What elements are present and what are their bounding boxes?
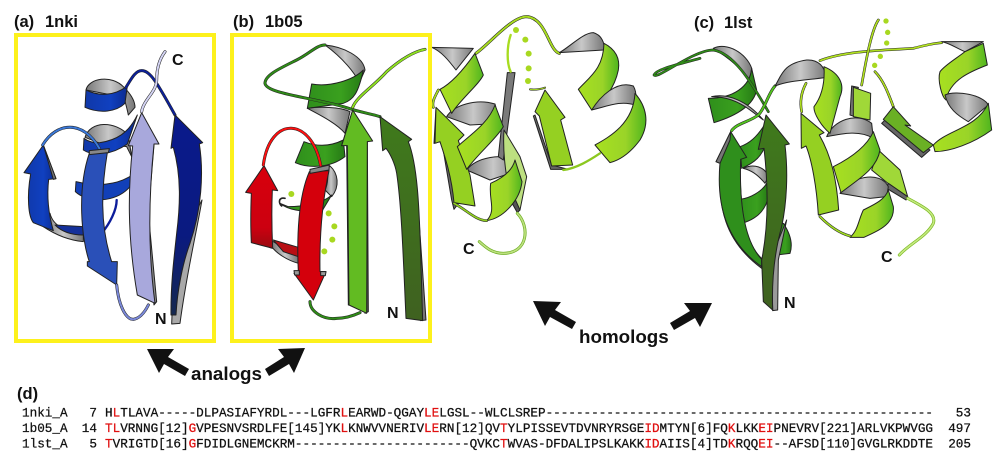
panel b: 1b05 red and green structure <box>246 45 426 321</box>
sequence alignment <box>22 406 971 452</box>
terminus labels: C <box>463 241 475 258</box>
dark right strand <box>171 115 203 324</box>
green helix <box>265 45 380 212</box>
panel b: 1b05 light green domain <box>432 17 646 253</box>
arrow: analogs right <box>265 348 305 376</box>
panel heading a: 1nki <box>45 13 78 31</box>
label: analogs: analogs <box>191 363 262 384</box>
left arrow strand <box>24 127 99 231</box>
label: homologs: homologs <box>579 326 669 347</box>
middle strand <box>82 149 148 319</box>
panel heading c: 1lst <box>724 14 753 32</box>
terminus labels: N <box>784 295 796 312</box>
terminus labels: N <box>155 311 167 328</box>
sequence alignment: 1lst_A <box>22 436 68 452</box>
panel heading a: (a) <box>14 13 34 31</box>
sequence alignment: 205 <box>948 436 971 452</box>
sequence alignment: HLTLAVA-----DLPASIAFYRDL---LGFRLEARWD-QGAYLELGSL--WLCLSREP--------------------------------------------------- <box>105 406 933 420</box>
light strand <box>128 52 165 305</box>
sequence alignment: 497 <box>948 421 971 436</box>
terminus labels: C <box>881 249 893 266</box>
arrow: analogs left <box>147 349 189 376</box>
panel heading d: (d) <box>17 385 38 403</box>
panel c: 1lst structure <box>654 18 992 311</box>
panel a: 1nki structure <box>24 52 203 324</box>
sequence alignment: 7 <box>89 406 97 420</box>
panel heading b: (b) <box>233 13 254 31</box>
terminus labels: C <box>172 52 184 69</box>
panel heading b: 1b05 <box>265 13 303 31</box>
sequence alignment: 14 <box>82 421 97 436</box>
red strands <box>246 128 329 300</box>
dark green strand <box>380 117 426 321</box>
sequence alignment: 5 <box>89 436 97 452</box>
helices and back loops <box>43 71 175 242</box>
sequence alignment: 53 <box>956 406 971 420</box>
bright green strand <box>310 49 425 319</box>
arrow: homologs left <box>533 301 576 329</box>
terminus labels <box>155 52 893 328</box>
sequence alignment: 1b05_A <box>22 421 68 436</box>
sequence alignment: 1nki_A <box>22 406 68 420</box>
panel heading c: (c) <box>694 14 714 32</box>
terminus labels: N <box>387 305 399 322</box>
sequence alignment: TLVRNNG[12]GVPESNVSRDLFE[145]YKLKNWVVNERIVLERN[12]QVTYLPISSEVTDVNRYRSGEIDMTYN[6]FQKLKKEIPNEVRV[221]ARLVKPWVGG <box>105 421 933 436</box>
yellow frame: analog panel a <box>16 35 214 341</box>
arrow: homologs right <box>670 303 712 330</box>
yellow frame: analog panel b <box>232 35 430 341</box>
disordered region dots <box>288 191 337 254</box>
sequence alignment: TVRIGTD[16]GFDIDLGNEMCKRM-----------------------QVKCTWVAS-DFDALIPSLKAKKIDAIIS[4]TDKRQQEI--AFSD[110]GVGLRKDDTE <box>105 436 933 452</box>
